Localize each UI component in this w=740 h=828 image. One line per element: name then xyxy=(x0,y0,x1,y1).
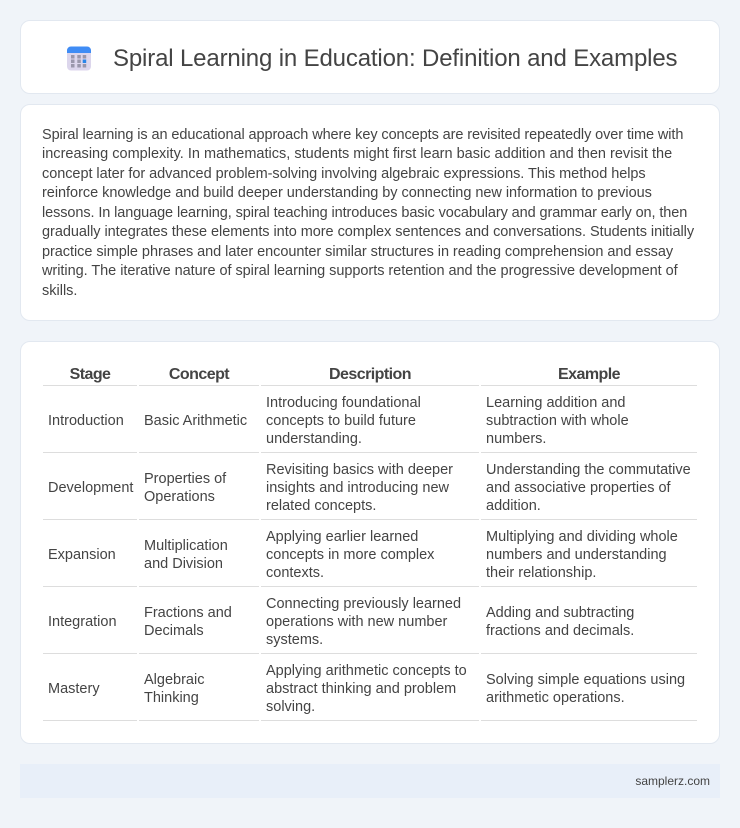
definition text block: writing. The iterative nature of spiral learning supports retention and the progressive development of xyxy=(42,263,678,279)
table row: Development: Properties of xyxy=(144,471,226,487)
table row: Mastery: solving. xyxy=(266,699,315,715)
table row: Integration: operations with new number xyxy=(266,614,447,630)
table row: Introduction: Basic Arithmetic xyxy=(144,413,247,429)
table row: Development xyxy=(43,462,697,520)
table row: Mastery xyxy=(43,663,697,721)
definition text block: Spiral learning is an educational approach where key concepts are revisited repeatedly over time with xyxy=(42,127,683,143)
table row: Integration: Decimals xyxy=(144,623,204,639)
table row: Integration: Adding and subtracting xyxy=(486,605,634,621)
definition text block xyxy=(42,127,694,299)
definition text block: skills. xyxy=(42,283,77,299)
table row: Introduction: concepts to build future xyxy=(266,413,416,429)
definition text block: gradually integrates these elements into more complex sentences and conversations. Students initially xyxy=(42,224,694,240)
definition text block: practice simple phrases and later encounter similar structures in reading comprehension and essay xyxy=(42,244,673,260)
table header: Example xyxy=(558,366,620,383)
table row: Mastery: Applying arithmetic concepts to xyxy=(266,663,467,679)
table row: Expansion: concepts in more complex xyxy=(266,547,434,563)
table row: Mastery: Solving simple equations using xyxy=(486,672,685,688)
definition text block: lessons. In language learning, spiral teaching introduces basic vocabulary and grammar early on, then xyxy=(42,205,687,221)
title: Spiral Learning in Education: Definition and Examples xyxy=(113,45,677,72)
table row: Introduction xyxy=(43,395,697,453)
header panel xyxy=(20,20,720,94)
table row: Expansion: their relationship. xyxy=(486,565,596,581)
table row: Expansion: contexts. xyxy=(266,565,324,581)
table row: Mastery: arithmetic operations. xyxy=(486,690,625,706)
table row: Introduction: Introduction xyxy=(48,413,124,429)
table row: Development: Understanding the commutative xyxy=(486,462,691,478)
panel: stages table xyxy=(20,341,720,744)
table header: Description xyxy=(329,366,411,383)
table row: Introduction: subtraction with whole xyxy=(486,413,629,429)
table row: Development: Revisiting basics with deeper xyxy=(266,462,453,478)
table header: Concept xyxy=(169,366,229,383)
table row: Integration: systems. xyxy=(266,632,323,648)
table row: Integration: Integration xyxy=(48,614,117,630)
table row: Integration: Fractions and xyxy=(144,605,232,621)
table row: Mastery: Thinking xyxy=(144,690,199,706)
table row: Expansion xyxy=(43,529,697,587)
panel: definition paragraph xyxy=(20,104,720,321)
table row: Integration xyxy=(43,596,697,654)
table header: Stage xyxy=(70,366,110,383)
footer credit: samplerz.com xyxy=(635,774,710,788)
table row: Development: insights and introducing new xyxy=(266,480,449,496)
table row: Development: Development xyxy=(48,480,133,496)
table row: Mastery: Mastery xyxy=(48,681,100,697)
table row: Expansion: Expansion xyxy=(48,547,116,563)
table row: Mastery: abstract thinking and problem xyxy=(266,681,456,697)
table row: Development: related concepts. xyxy=(266,498,376,514)
table row: Introduction: numbers. xyxy=(486,431,546,447)
table row: Integration: fractions and decimals. xyxy=(486,623,634,639)
table row: Expansion: Applying earlier learned xyxy=(266,529,418,545)
table row: Expansion: numbers and understanding xyxy=(486,547,667,563)
icon: calendar grid xyxy=(67,46,91,70)
footer bar xyxy=(20,764,720,798)
table row: Development: and associative properties of xyxy=(486,480,671,496)
table header xyxy=(43,366,697,386)
table row: Mastery: Algebraic xyxy=(144,672,204,688)
definition text block: increasing complexity. In mathematics, students might first learn basic addition and then revisit the xyxy=(42,146,672,162)
table row: Introduction: understanding. xyxy=(266,431,362,447)
table row: Integration: Connecting previously learned xyxy=(266,596,461,612)
table row: Development: Operations xyxy=(144,489,215,505)
definition text block: reinforce knowledge and build deeper understanding by connecting new information to previous xyxy=(42,185,652,201)
definition text block: concept later for advanced problem-solving involving algebraic expressions. This method helps xyxy=(42,166,646,182)
table row: Expansion: Multiplication xyxy=(144,538,228,554)
table row: Development: addition. xyxy=(486,498,541,514)
table row: Introduction: Introducing foundational xyxy=(266,395,421,411)
table row: Expansion: Multiplying and dividing whole xyxy=(486,529,678,545)
table row: Introduction: Learning addition and xyxy=(486,395,625,411)
table row: Expansion: and Division xyxy=(144,556,223,572)
